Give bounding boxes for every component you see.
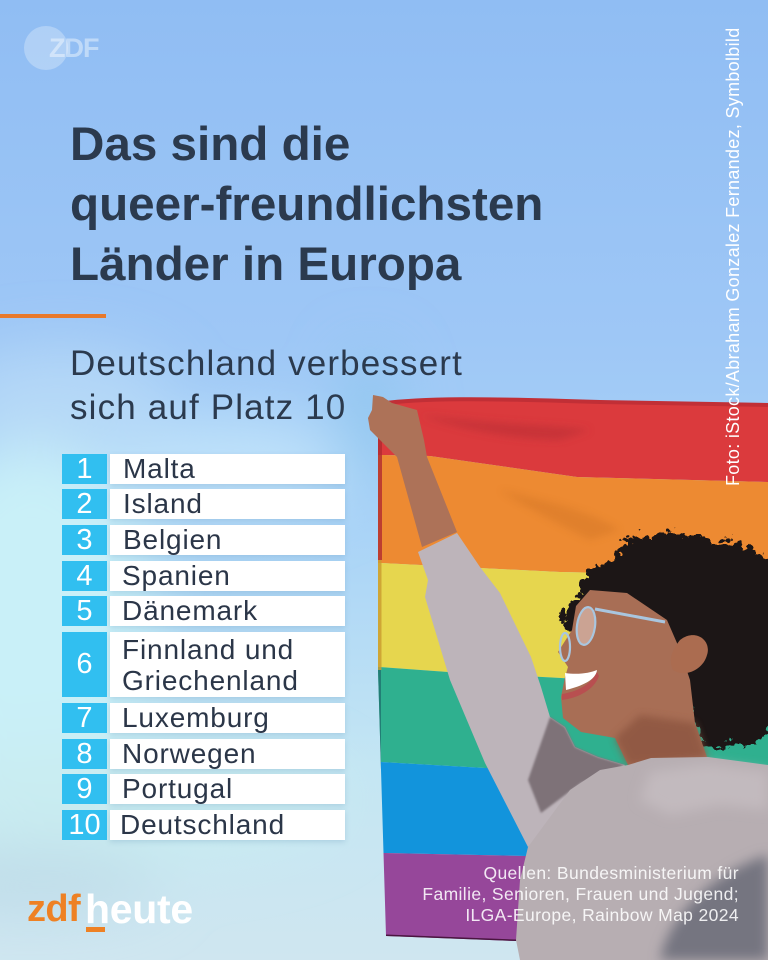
zdfheute logo: zdf — [27, 888, 80, 930]
rank 8 — [62, 738, 346, 772]
rank 2: Island — [123, 488, 203, 519]
subtitle: sich auf Platz 10 — [70, 388, 346, 427]
rank 6: Finnland und — [122, 634, 294, 665]
accent line — [0, 314, 106, 318]
zdfheute logo — [27, 886, 193, 932]
sources: ILGA-Europe, Rainbow Map 2024 — [465, 905, 739, 925]
blue — [380, 762, 528, 856]
sweatshirt body — [516, 757, 768, 960]
rank 8: 8 — [76, 738, 93, 770]
rank 9 — [62, 772, 346, 808]
rank 1: 1 — [76, 452, 93, 484]
hair — [559, 527, 768, 745]
rank 3 — [62, 524, 346, 558]
rank 2 — [62, 488, 346, 522]
sources: Familie, Senioren, Frauen und Jugend; — [422, 884, 739, 904]
icon: ZDF logo — [24, 26, 98, 70]
neck and face — [558, 590, 708, 765]
rank 6 — [62, 632, 346, 700]
rank 5: 5 — [76, 594, 93, 626]
smile — [565, 670, 597, 690]
rank 3: 3 — [76, 524, 93, 556]
sweatshirt sleeve — [418, 533, 625, 847]
yellow — [378, 563, 589, 678]
rank 7: Luxemburg — [122, 702, 270, 733]
rank 4 — [62, 560, 346, 594]
sweatshirt shadow — [660, 855, 768, 960]
rank 8: Norwegen — [122, 738, 256, 769]
icon: ZDF logo: ZDF — [49, 33, 98, 63]
rank 9: Portugal — [122, 773, 233, 804]
ranking list — [62, 452, 346, 844]
red — [370, 395, 768, 482]
rank 5: Dänemark — [122, 595, 258, 626]
glasses — [560, 606, 665, 661]
rank 4: Spanien — [122, 560, 231, 591]
sources: Quellen: Bundesministerium für — [483, 863, 739, 883]
clouds — [0, 350, 395, 910]
rank 1 — [62, 452, 346, 487]
title: Länder in Europa — [70, 238, 461, 291]
sources — [422, 863, 739, 925]
rainbow flag — [370, 395, 768, 960]
title — [70, 118, 543, 291]
rank 10: 10 — [68, 808, 101, 840]
person — [368, 395, 768, 960]
rank 7: 7 — [76, 702, 93, 734]
rank 5 — [62, 594, 346, 630]
orange — [370, 455, 768, 576]
rank 3: Belgien — [123, 524, 222, 555]
rank 1: Malta — [123, 453, 196, 484]
rank 4: 4 — [76, 560, 93, 592]
rank 6: Griechenland — [122, 665, 299, 696]
raised arm — [368, 395, 457, 547]
title: queer-freundlichsten — [70, 178, 543, 231]
subtitle — [70, 344, 463, 427]
zdfheute logo: heute — [85, 886, 193, 932]
photo credit: Foto: iStock/Abraham Gonzalez Fernandez, Symbolbild — [723, 27, 743, 486]
title: Das sind die — [70, 118, 350, 171]
flag shading — [378, 438, 382, 560]
rank 9: 9 — [76, 772, 93, 804]
rank 10 — [62, 808, 346, 844]
subtitle: Deutschland verbessert — [70, 344, 463, 383]
purple — [384, 853, 526, 941]
rank 10: Deutschland — [120, 809, 285, 840]
rank 2: 2 — [76, 488, 93, 520]
rank 6: 6 — [76, 648, 93, 680]
rank 7 — [62, 702, 346, 736]
ear — [671, 635, 708, 673]
green — [370, 667, 768, 768]
